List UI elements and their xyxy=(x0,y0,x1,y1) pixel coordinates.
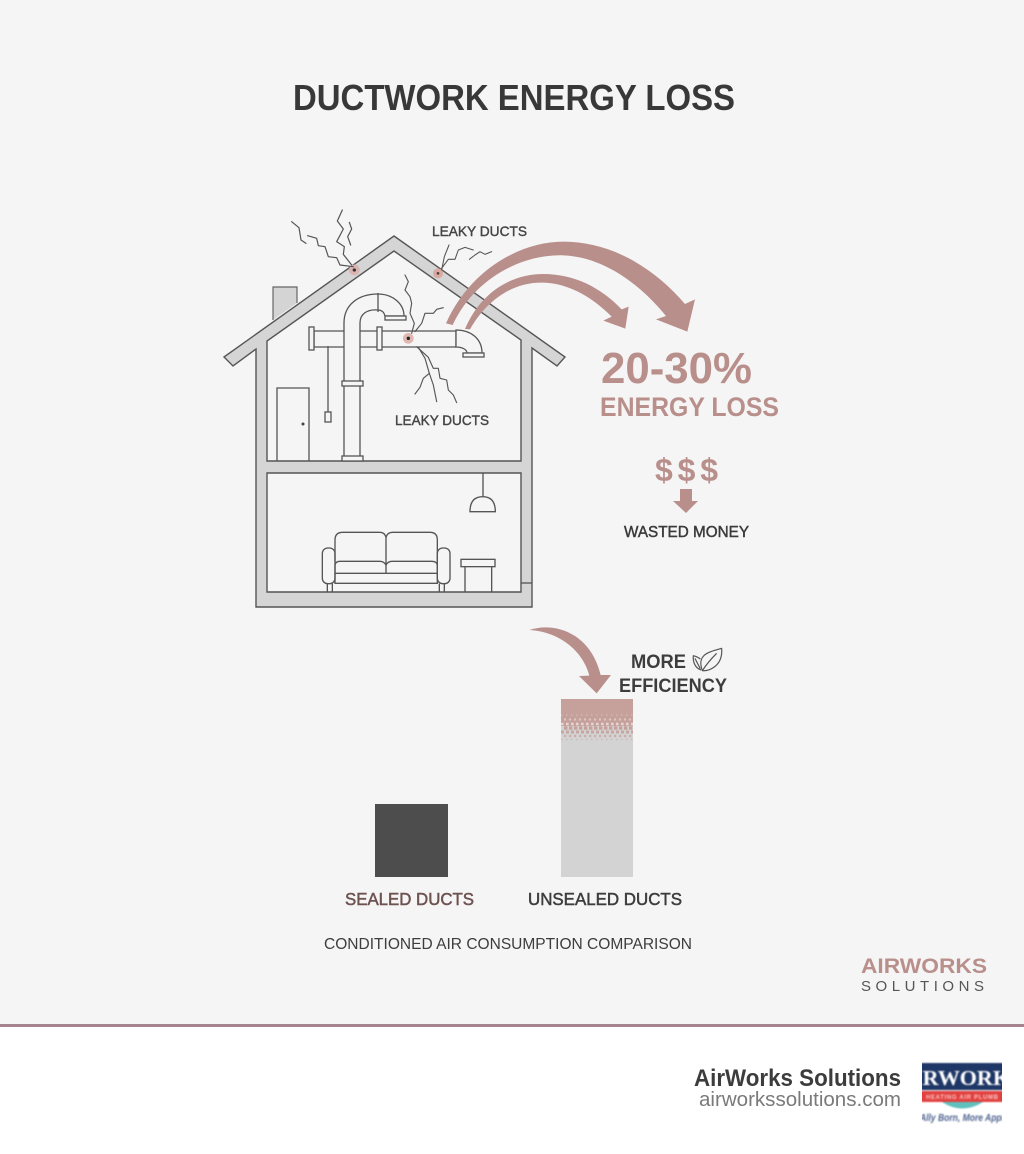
leak points xyxy=(349,265,443,344)
stat: energy loss xyxy=(600,344,779,422)
chart caption: CONDITIONED AIR CONSUMPTION COMPARISON xyxy=(324,936,692,953)
efficiency label: EFFICIENCY xyxy=(619,676,727,697)
footer logo: Ally Born, More Appl xyxy=(919,1113,1004,1124)
bar: sealed ducts xyxy=(375,804,448,877)
watermark subtitle: SOLUTIONS xyxy=(861,978,984,995)
air leak cracks: left roof xyxy=(292,210,353,267)
more label: MORE xyxy=(631,652,686,673)
footer logo: HEATING AIR PLUMB xyxy=(926,1095,999,1101)
label: sealed ducts: SEALED DUCTS xyxy=(345,889,474,909)
footer logo: IRWORK xyxy=(914,1066,1011,1090)
icon: leaves xyxy=(693,648,722,671)
sofa xyxy=(322,532,450,592)
arrow: to efficiency xyxy=(529,627,611,693)
wasted money callout xyxy=(624,452,749,541)
air leak cracks: duct xyxy=(405,275,457,403)
footer xyxy=(694,1063,1011,1124)
footer logo xyxy=(922,1062,1002,1124)
arrow: small xyxy=(465,274,629,329)
watermark name: AIRWORKS xyxy=(861,955,987,978)
percentage: 20-30% xyxy=(601,344,752,393)
ceiling lamp xyxy=(470,473,495,512)
air leak cracks: right roof xyxy=(442,245,492,270)
door xyxy=(277,388,309,461)
bar: unsealed ducts xyxy=(561,699,633,877)
bar chart: conditioned air consumption xyxy=(324,699,692,953)
label: unsealed ducts: UNSEALED DUCTS xyxy=(528,889,682,909)
footer url: airworkssolutions.com xyxy=(699,1089,901,1111)
label: leaky ducts, roof: LEAKY DUCTS xyxy=(432,224,527,239)
stat label: ENERGY LOSS xyxy=(600,392,779,422)
wasted money label: WASTED MONEY xyxy=(624,524,749,541)
icon: down arrow xyxy=(673,489,698,513)
dollar signs: $$$ xyxy=(655,452,718,488)
lower floor furniture xyxy=(322,473,532,592)
label: leaky ducts, interior: LEAKY DUCTS xyxy=(395,413,489,428)
footer rule xyxy=(0,1024,1024,1027)
watermark logo xyxy=(861,955,987,995)
ductwork pipes xyxy=(309,293,484,461)
house illustration xyxy=(224,210,565,607)
side table xyxy=(461,559,495,592)
arrow: large xyxy=(446,242,695,332)
more efficiency callout xyxy=(619,648,727,697)
arrows: escaping air xyxy=(446,242,695,332)
chimney xyxy=(273,287,297,320)
title: DUCTWORK ENERGY LOSS xyxy=(293,77,735,118)
footer brand name: AirWorks Solutions xyxy=(694,1065,901,1092)
house walls and roof xyxy=(224,236,565,607)
